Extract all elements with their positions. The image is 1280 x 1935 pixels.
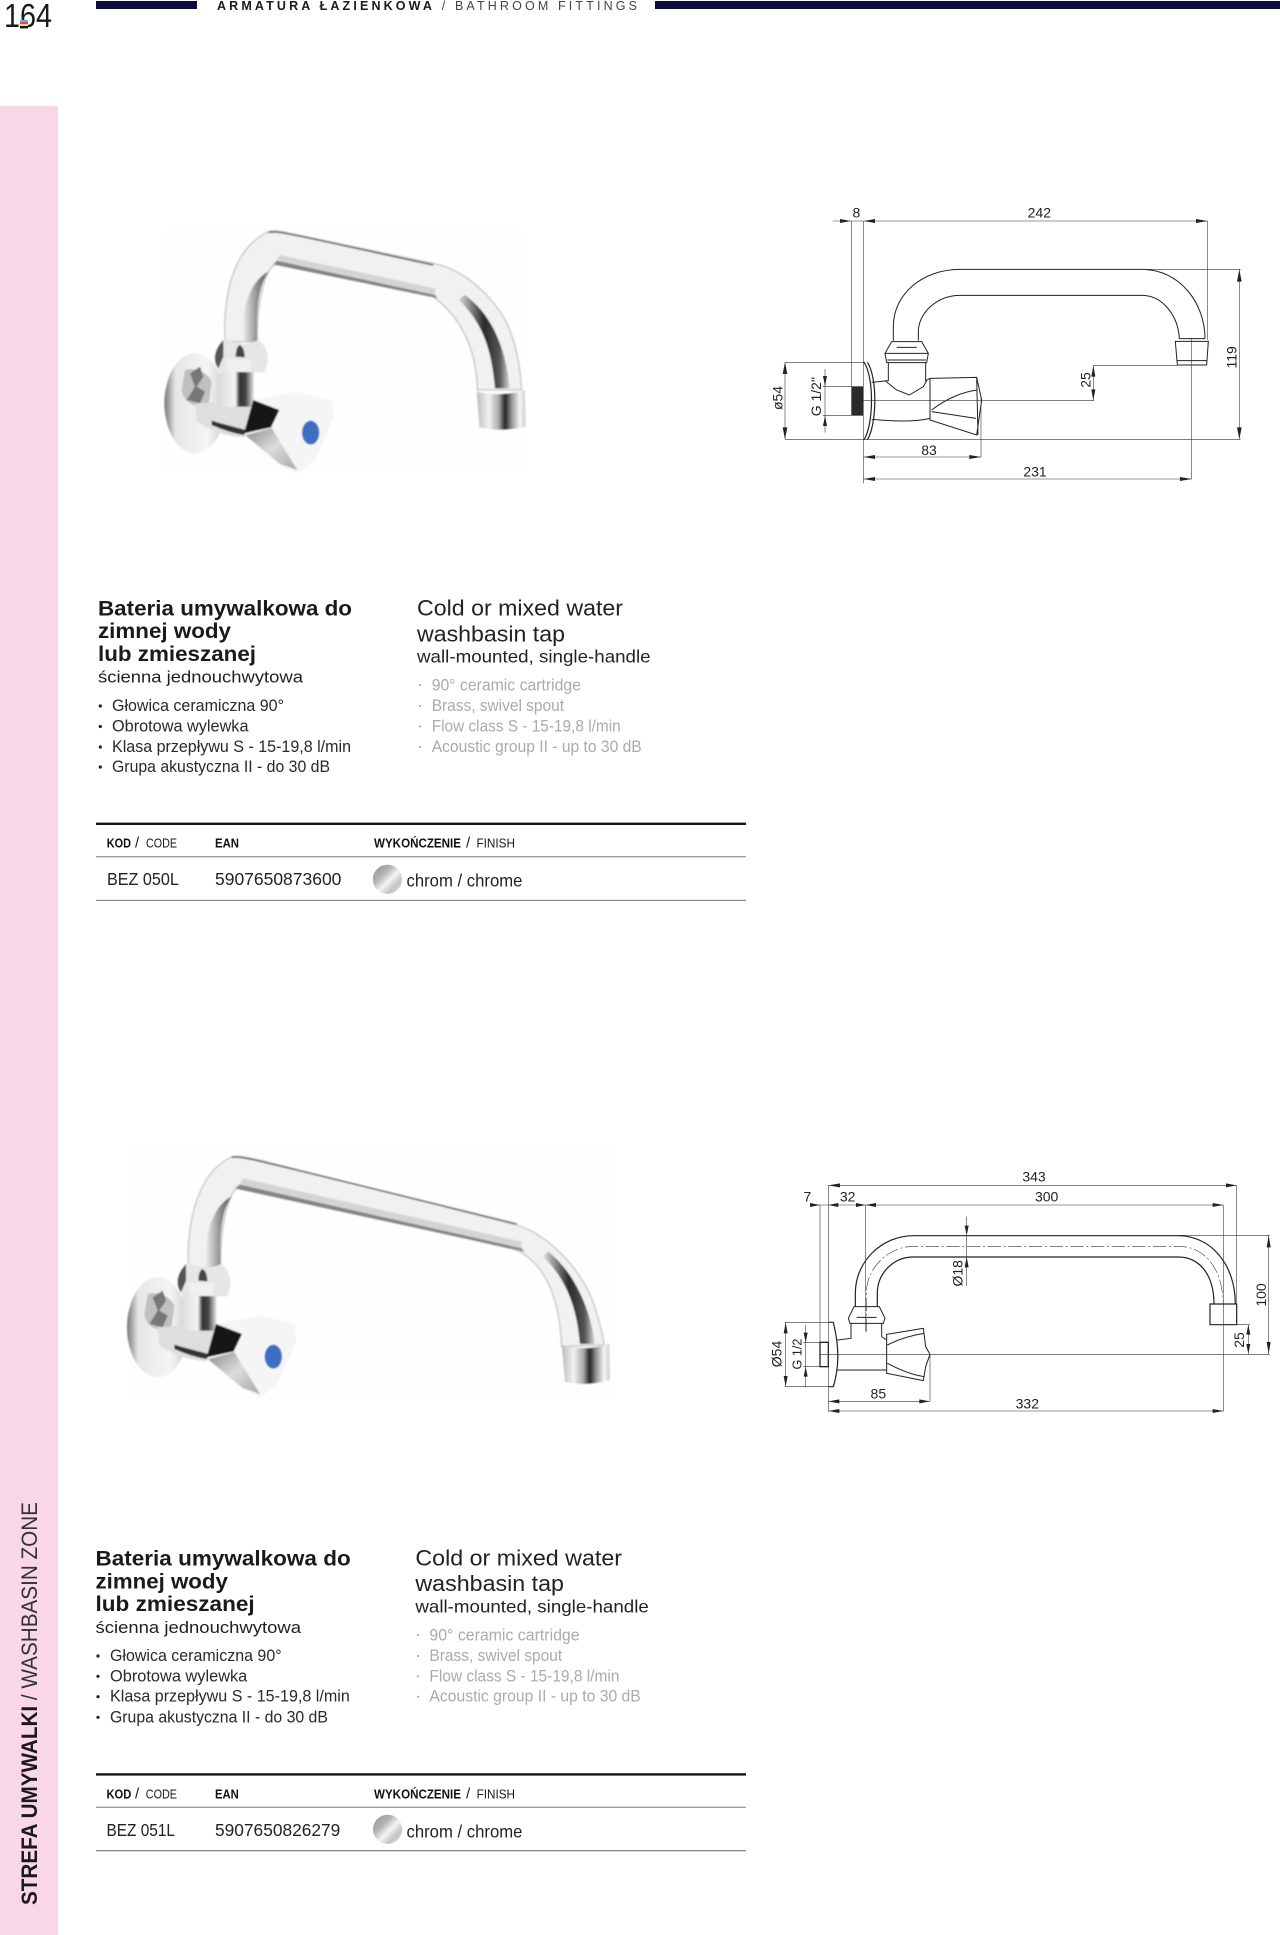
product table: BEZ 051L: WYKOŃCZENIE bbox=[374, 1786, 461, 1801]
product text: English description: Cold or mixed water bbox=[417, 596, 624, 621]
product text: Polish description: Klasa przepływu S - 15-19,8 l/min bbox=[112, 738, 351, 756]
product text: Polish description, second tap: Obrotowa wylewka bbox=[110, 1667, 248, 1685]
product table: BEZ 051L: chrom / chrome bbox=[406, 1821, 522, 1841]
product table: BEZ 051L: FINISH bbox=[477, 1787, 515, 1801]
product table: BEZ 050L bbox=[96, 823, 746, 901]
dimensions: 300 bbox=[1035, 1189, 1059, 1205]
product text: Polish description: Bateria umywalkowa do bbox=[98, 597, 352, 621]
product text: English description, second tap: washbasin tap bbox=[414, 1571, 564, 1596]
product text: English description, second tap: Acoustic group II - up to 30 dB bbox=[429, 1688, 641, 1706]
product text: Polish description, second tap: ścienna jednouchwytowa bbox=[96, 1618, 302, 1637]
dimensions: Ø18 bbox=[949, 1260, 965, 1287]
product text: English description, second tap: 90° ceramic cartridge bbox=[429, 1627, 580, 1645]
product table: BEZ 051L: 5907650826279 bbox=[215, 1820, 340, 1840]
dimensions: Ø54 bbox=[769, 1341, 785, 1367]
dimensions bbox=[769, 1169, 1271, 1413]
dimensions: 85 bbox=[871, 1385, 886, 1401]
product table: BEZ 051L: CODE bbox=[146, 1787, 177, 1801]
side tab: zone label bbox=[0, 106, 58, 1935]
dimensions: 8 bbox=[852, 204, 860, 220]
side tab: zone label: STREFA UMYWALKI / WASHBASIN ZONE bbox=[17, 1502, 42, 1905]
dimensions: ø54 bbox=[769, 386, 785, 410]
technical drawing: BEZ 050L bbox=[769, 204, 1242, 483]
product text: Polish description: Obrotowa wylewka bbox=[112, 718, 249, 736]
product text: English description: wall-mounted, single-handle bbox=[416, 647, 651, 667]
tap outline bbox=[820, 1236, 1237, 1387]
product table: BEZ 050L: 5907650873600 bbox=[215, 869, 342, 889]
product text: English description: Acoustic group II - up to 30 dB bbox=[432, 738, 642, 756]
product table: BEZ 050L: / bbox=[466, 834, 471, 851]
product table: BEZ 050L: WYKOŃCZENIE bbox=[374, 835, 461, 850]
product text: Polish description bbox=[98, 597, 352, 776]
product table: BEZ 050L: EAN bbox=[215, 836, 239, 850]
product text: English description: Flow class S - 15-19,8 l/min bbox=[432, 718, 621, 736]
product text: Polish description, second tap: Klasa przepływu S - 15-19,8 l/min bbox=[110, 1688, 350, 1706]
dimensions: 25 bbox=[1231, 1332, 1247, 1348]
product text: Polish description: Głowica ceramiczna 90° bbox=[112, 697, 284, 715]
product table: BEZ 050L: CODE bbox=[146, 836, 177, 850]
product text: English description: washbasin tap bbox=[416, 622, 565, 647]
dimensions: G 1/2 bbox=[791, 1339, 805, 1369]
product text: Polish description, second tap: zimnej wody bbox=[96, 1570, 228, 1594]
product table: BEZ 050L: BEZ 050L bbox=[107, 869, 179, 889]
dimensions: 231 bbox=[1023, 464, 1047, 480]
product text: Polish description: zimnej wody bbox=[98, 619, 231, 643]
dimensions: 343 bbox=[1022, 1169, 1046, 1185]
product table: BEZ 050L: chrom / chrome bbox=[406, 871, 522, 891]
product table: BEZ 051L: BEZ 051L bbox=[106, 1820, 175, 1840]
technical drawing: BEZ 051L bbox=[769, 1169, 1271, 1413]
product text: Polish description, second tap: Grupa akustyczna II - do 30 dB bbox=[110, 1708, 328, 1726]
product text: Polish description: Grupa akustyczna II - do 30 dB bbox=[112, 758, 330, 776]
product text: English description, second tap: wall-mounted, single-handle bbox=[414, 1597, 649, 1617]
product text: Polish description: lub zmieszanej bbox=[98, 642, 256, 666]
product text: English description, second tap bbox=[414, 1545, 649, 1706]
product table: BEZ 051L bbox=[96, 1773, 746, 1851]
dimensions: 83 bbox=[921, 442, 937, 458]
dimensions bbox=[769, 204, 1242, 483]
product text: English description bbox=[416, 596, 651, 756]
product table: BEZ 051L: KOD bbox=[106, 1787, 131, 1801]
product text: Polish description, second tap bbox=[96, 1546, 351, 1726]
product text: Polish description: ścienna jednouchwytowa bbox=[98, 668, 304, 687]
product text: English description, second tap: Brass, swivel spout bbox=[429, 1647, 563, 1665]
product table: BEZ 051L: / bbox=[135, 1785, 140, 1802]
product text: English description, second tap: Cold or mixed water bbox=[415, 1545, 623, 1570]
product table: BEZ 050L: KOD bbox=[107, 836, 131, 850]
product text: English description: 90° ceramic cartridge bbox=[432, 677, 581, 695]
dimensions: G 1/2" bbox=[808, 377, 824, 416]
product text: Polish description, second tap: Głowica ceramiczna 90° bbox=[110, 1647, 282, 1665]
dimensions: 32 bbox=[840, 1189, 856, 1205]
tap outline bbox=[851, 269, 1208, 440]
dimensions: 100 bbox=[1253, 1283, 1269, 1307]
header band bbox=[96, 0, 1280, 13]
product text: English description: Brass, swivel spout bbox=[432, 697, 564, 715]
product photo: BEZ 050L tap bbox=[164, 230, 526, 474]
product text: English description, second tap: Flow class S - 15-19,8 l/min bbox=[429, 1667, 619, 1685]
dimensions: 7 bbox=[803, 1189, 811, 1205]
dimensions: 332 bbox=[1016, 1395, 1039, 1411]
product text: Polish description, second tap: Bateria umywalkowa do bbox=[96, 1546, 351, 1570]
dimensions: 25 bbox=[1077, 372, 1093, 388]
product table: BEZ 051L: EAN bbox=[215, 1787, 239, 1801]
product text: Polish description, second tap: lub zmieszanej bbox=[96, 1592, 255, 1616]
product table: BEZ 051L: / bbox=[466, 1785, 471, 1802]
product table: BEZ 050L: FINISH bbox=[476, 836, 515, 850]
product table: BEZ 050L: / bbox=[135, 834, 140, 851]
product photo: BEZ 051L tap bbox=[127, 1150, 615, 1400]
dimensions: 242 bbox=[1028, 204, 1051, 220]
dimensions: 119 bbox=[1224, 346, 1240, 368]
